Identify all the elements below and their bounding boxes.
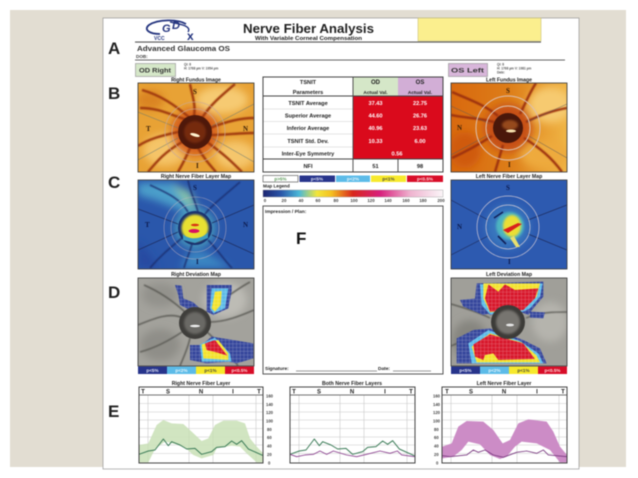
panel: left deviation map: [451, 272, 568, 374]
panel: left nerve fiber layer map: Left Nerve Fiber Layer Map: [476, 174, 542, 180]
date of birth: DOB:: [136, 54, 148, 59]
panel: left fundus image: N: [457, 124, 462, 132]
chart: right nerve fiber layer: S: [166, 390, 170, 396]
probability legend: p<5%: [311, 177, 323, 182]
deviation legend: [138, 366, 254, 374]
chart: left nerve fiber layer: Left Nerve Fiber Layer: [477, 381, 531, 387]
panel: right nerve fiber layer map: S: [193, 184, 197, 192]
deviation legend: p<5%: [459, 368, 472, 373]
section letters: D: [108, 283, 120, 302]
panel: impression / plan: Signature:: [265, 366, 289, 372]
panel: TSNIT parameters table: TSNIT: [300, 80, 317, 86]
panel: right nerve fiber layer map: T: [145, 221, 150, 229]
deviation legend: p<0.5%: [232, 368, 247, 373]
panel: TSNIT parameters table: TSNIT Average: [288, 101, 328, 107]
map legend: 60: [316, 198, 321, 203]
panel: TSNIT parameters table: TSNIT Std. Dev.: [287, 139, 329, 145]
panel: right deviation map: Right Deviation Map: [171, 272, 221, 278]
report sheet: [103, 18, 579, 469]
map legend: 40: [299, 198, 304, 203]
OS Left tag: Qi: 8: [497, 62, 504, 66]
yellow name box: [418, 18, 541, 41]
map legend: 80: [334, 198, 339, 203]
OD Right tag: [136, 62, 218, 76]
chart: left nerve fiber layer: T: [561, 390, 565, 396]
panel: TSNIT parameters table: 44.60: [368, 114, 382, 120]
panel: impression / plan: Impression / Plan:: [265, 209, 307, 215]
logo: GDx VCC: G: [162, 23, 171, 35]
map legend: 160: [402, 198, 410, 203]
chart: both nerve fiber layers: I: [384, 390, 386, 396]
panel: TSNIT parameters table: 6.00: [415, 139, 425, 145]
panel: right deviation map: [138, 272, 254, 374]
logo: GDx VCC: D: [172, 20, 180, 32]
map legend: 20: [282, 198, 287, 203]
chart: both nerve fiber layers: [290, 381, 415, 463]
chart: left nerve fiber layer: 60: [434, 435, 439, 440]
OS Left tag: [448, 62, 531, 76]
panel: right fundus image: S: [193, 88, 197, 96]
OD Right tag: OD Right: [139, 68, 172, 74]
OS Left tag: OS Left: [451, 68, 485, 74]
panel: left deviation map: Left Deviation Map: [486, 272, 532, 278]
chart: left nerve fiber layer: 20: [434, 452, 439, 457]
map legend: [263, 184, 445, 203]
panel: right fundus image: T: [146, 125, 151, 133]
panel: TSNIT parameters table: Superior Average: [285, 114, 331, 120]
panel: TSNIT parameters table: 26.76: [413, 114, 427, 120]
chart: right nerve fiber layer: 160: [266, 394, 274, 398]
section letters: C: [108, 173, 120, 192]
panel: TSNIT parameters table: 0.56: [392, 152, 402, 158]
OS Left tag: H: 1768 µm V: 1981 µm: [497, 66, 531, 70]
optic disc: [178, 115, 212, 149]
chart: left nerve fiber layer: N: [502, 390, 506, 396]
chart: left nerve fiber layer: I: [536, 390, 538, 396]
section letters: B: [108, 84, 120, 103]
panel: TSNIT parameters table: 10.33: [368, 139, 382, 145]
panel: TSNIT parameters table: Inter-Eye Symmetry: [282, 152, 335, 158]
green normative band: [139, 420, 263, 462]
chart: right nerve fiber layer: 140: [266, 402, 274, 407]
deviation legend: p<5%: [146, 368, 159, 373]
map legend: 140: [384, 198, 392, 203]
logo: GDx VCC: x: [187, 29, 194, 43]
chart: right nerve fiber layer: Right Nerve Fiber Layer: [172, 381, 230, 387]
chart: right nerve fiber layer: 40: [267, 444, 272, 448]
optic disc: [179, 307, 211, 339]
panel: left nerve fiber layer map: [451, 174, 567, 269]
panel: right fundus image: I: [196, 162, 199, 170]
probability legend: p>5%: [274, 177, 287, 182]
panel: left nerve fiber layer map: I: [508, 258, 511, 266]
map legend: Map Legend: [263, 184, 290, 188]
chart: left nerve fiber layer: 0: [436, 460, 439, 466]
panel: TSNIT parameters table: NFI: [303, 164, 313, 170]
panel: TSNIT parameters table: 23.63: [413, 126, 427, 132]
subtitle: With Variable Corneal Compensation: [255, 36, 362, 42]
panel: TSNIT parameters table: [263, 77, 443, 172]
panel: TSNIT parameters table: Parameters: [293, 90, 323, 96]
map legend: 200: [437, 198, 445, 203]
chart: left nerve fiber layer: 140: [433, 402, 441, 407]
chart: both nerve fiber layers: T: [409, 390, 413, 396]
chart: left nerve fiber layer: 160: [433, 394, 441, 398]
green right-eye line: [290, 439, 414, 456]
panel: TSNIT parameters table: OD: [371, 80, 381, 86]
section letters: A: [108, 39, 120, 58]
panel: TSNIT parameters table: 40.96: [368, 126, 382, 132]
panel: right nerve fiber layer map: I: [196, 258, 199, 266]
logo: GDx VCC: [147, 20, 194, 43]
optic disc: [493, 113, 523, 143]
panel: impression / plan: Date:: [378, 366, 390, 372]
panel: right nerve fiber layer map: Right Nerve Fiber Layer Map: [161, 174, 231, 180]
probability legend: p<2%: [347, 177, 359, 182]
chart: left nerve fiber layer: 80: [434, 427, 439, 432]
panel: TSNIT parameters table: 51: [372, 164, 379, 170]
panel: TSNIT parameters table: OS: [416, 80, 424, 86]
probability legend: p<0.5%: [417, 177, 433, 182]
chart: right nerve fiber layer: 120: [266, 410, 274, 415]
deviation legend: p<2%: [175, 368, 188, 373]
title: Nerve Fiber Analysis: [243, 22, 374, 36]
panel: TSNIT parameters table: 98: [417, 164, 423, 170]
section letter F: F: [296, 229, 306, 248]
section letters: [108, 39, 120, 421]
logo: GDx VCC: VCC: [154, 36, 165, 42]
chart: right nerve fiber layer: 20: [267, 452, 272, 457]
deviation legend: p<1%: [517, 368, 530, 373]
chart: left nerve fiber layer: [433, 381, 567, 466]
header: [135, 18, 565, 60]
chart: right nerve fiber layer: 80: [267, 427, 272, 432]
section letters: E: [108, 402, 119, 421]
panel: left fundus image: S: [506, 87, 510, 95]
chart: right nerve fiber layer: I: [232, 390, 234, 396]
chart: both nerve fiber layers: Both Nerve Fiber Layers: [322, 381, 382, 387]
chart: both nerve fiber layers: N: [350, 390, 354, 396]
panel: left fundus image: [449, 78, 572, 172]
deviation squares: [457, 282, 547, 363]
chart: left nerve fiber layer: T: [445, 390, 449, 396]
map legend: 100: [350, 198, 358, 203]
chart: right nerve fiber layer: 100: [266, 418, 274, 424]
chart: left nerve fiber layer: 100: [433, 418, 441, 424]
chart: right nerve fiber layer: T: [257, 390, 261, 396]
panel: TSNIT parameters table: Inferior Average: [287, 126, 329, 132]
OS Left tag: Date:: [497, 70, 505, 74]
panel: TSNIT parameters table: 22.75: [413, 101, 427, 107]
chart: left nerve fiber layer: S: [469, 390, 473, 396]
chart: both nerve fiber layers: T: [292, 390, 296, 396]
OD Right tag: H: 1768 µm V: 1954 µm: [184, 66, 218, 70]
deviation legend: p<0.5%: [545, 368, 560, 373]
panel: TSNIT parameters table: 37.43: [368, 101, 382, 107]
purple left-eye line: [290, 451, 415, 457]
chart: left nerve fiber layer: 120: [433, 410, 441, 415]
deviation squares: [175, 285, 253, 363]
probability legend: p<1%: [382, 177, 395, 182]
panel: left nerve fiber layer map: N: [457, 223, 462, 231]
chart: right nerve fiber layer: N: [199, 390, 203, 396]
panel: left fundus image: Left Fundus Image: [486, 78, 532, 84]
panel: right nerve fiber layer map: N: [243, 221, 248, 229]
chart: right nerve fiber layer: 60: [267, 435, 272, 440]
map legend: 120: [367, 198, 375, 203]
OD Right tag: Qi: 8: [184, 62, 191, 66]
disc with retardation centre: [496, 212, 524, 240]
chart: left nerve fiber layer: 40: [434, 444, 439, 448]
chart: right nerve fiber layer: T: [141, 390, 145, 396]
chart: right nerve fiber layer: 0: [268, 460, 271, 466]
probability legend: [263, 176, 443, 182]
deviation legend: p<2%: [488, 368, 501, 373]
panel: TSNIT parameters table: Actual Val.: [408, 90, 432, 96]
deviation legend: [451, 366, 567, 374]
panel: TSNIT parameters table: Actual Val.: [363, 90, 388, 96]
panel: right fundus image: [136, 78, 255, 172]
panel: right fundus image: N: [243, 125, 248, 133]
optic disc: [491, 305, 525, 339]
panel: right fundus image: Right Fundus Image: [171, 78, 221, 84]
deviation legend: p<1%: [204, 368, 217, 373]
panel: right nerve fiber layer map: [138, 174, 254, 269]
map legend: 0: [264, 198, 267, 203]
purple normative band: [442, 419, 567, 462]
chart: both nerve fiber layers: S: [317, 390, 321, 396]
patient name: Advanced Glaucoma OS: [137, 44, 230, 53]
chart: right nerve fiber layer: [139, 381, 274, 466]
panel: impression / plan: [263, 206, 443, 374]
map legend: 180: [419, 198, 427, 203]
panel: left nerve fiber layer map: S: [506, 184, 510, 192]
disc with retardation centre: [178, 211, 212, 245]
panel: left fundus image: I: [508, 161, 511, 169]
